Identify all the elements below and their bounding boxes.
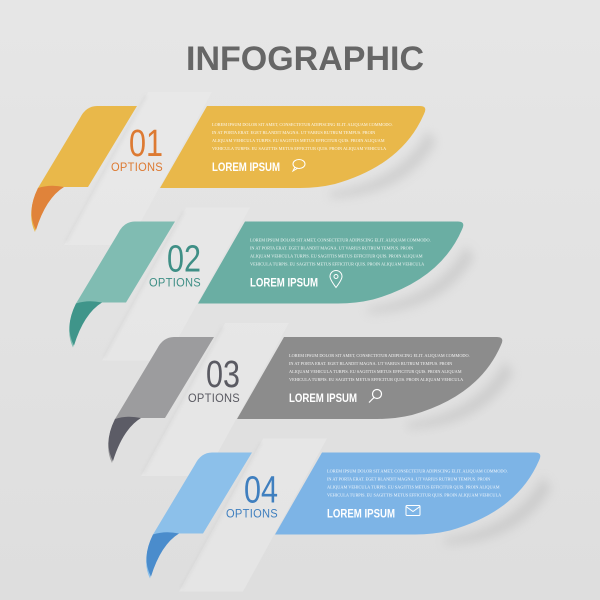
body text 02 (250, 238, 431, 266)
band 01 (31, 92, 436, 245)
ribbon curl 01 (31, 106, 137, 232)
body text 01: LOREM IPSUM DOLOR SIT AMET, CONSECTETUR ADIPISCING ELIT. ALIQUAM COMMODO. (212, 122, 393, 128)
body text 02: LOREM IPSUM DOLOR SIT AMET, CONSECTETUR ADIPISCING ELIT. ALIQUAM COMMODO. (250, 238, 431, 244)
body text 01: VEHICULA TURPIS. EU SAGITTIS METUS EFFICITUR QUIS. PROIN ALIQUAM VEHICULA (212, 146, 387, 151)
body text 04: IN AT PORTA ERAT. EGET BLANDIT MAGNA. UT VARIUS RUTRUM TEMPUS. PROIN (327, 476, 490, 482)
body text 04 (327, 468, 508, 498)
main panel 03 (237, 337, 502, 419)
main panel 02 (198, 222, 463, 304)
body text 03: ALIQUAM VEHICULA TURPIS. EU SAGITTIS METUS EFFICITUR QUIS. PROIN ALIQUAM (289, 369, 462, 374)
body text 01: IN AT PORTA ERAT. EGET BLANDIT MAGNA. UT VARIUS RUTRUM TEMPUS. PROIN (212, 130, 375, 135)
body text 01: ALIQUAM VEHICULA TURPIS. EU SAGITTIS METUS EFFICITUR QUIS. PROIN ALIQUAM (212, 138, 385, 143)
title: INFOGRAPHIC (186, 40, 424, 78)
band 04: LOREM IPSUM (327, 508, 395, 520)
ribbon curl 04 (146, 452, 252, 578)
icon: magnifier (369, 390, 382, 402)
body text 03: VEHICULA TURPIS. EU SAGITTIS METUS EFFICITUR QUIS. PROIN ALIQUAM VEHICULA (289, 377, 464, 382)
number 02: 02 (167, 238, 201, 280)
icon: location pin (330, 270, 342, 288)
main panel 04 (275, 452, 540, 534)
body text 01 (212, 122, 393, 151)
body text 03: IN AT PORTA ERAT. EGET BLANDIT MAGNA. UT VARIUS RUTRUM TEMPUS. PROIN (289, 361, 452, 366)
band 03 (108, 323, 513, 476)
ribbon curl 02 (69, 222, 175, 348)
band 04 (146, 438, 551, 592)
number 03: 03 (206, 354, 240, 396)
band 02 (69, 208, 474, 360)
band 04: OPTIONS (226, 506, 278, 520)
body text 04: ALIQUAM VEHICULA TURPIS. EU SAGITTIS METUS EFFICITUR QUIS. PROIN ALIQUAM (327, 484, 500, 490)
main panel 01 (160, 106, 425, 188)
body text 02: VEHICULA TURPIS. EU SAGITTIS METUS EFFICITUR QUIS. PROIN ALIQUAM VEHICULA (250, 262, 425, 266)
body text 03: LOREM IPSUM DOLOR SIT AMET, CONSECTETUR ADIPISCING ELIT. ALIQUAM COMMODO. (289, 353, 470, 359)
band 02: OPTIONS (149, 276, 201, 290)
ribbon curl 03 (108, 337, 214, 463)
band 01: LOREM IPSUM (212, 162, 280, 174)
number 04: 04 (244, 470, 278, 512)
body text 04: VEHICULA TURPIS. EU SAGITTIS METUS EFFICITUR QUIS. PROIN ALIQUAM VEHICULA (327, 492, 502, 498)
band 02: LOREM IPSUM (250, 278, 318, 290)
icon: chat (293, 160, 305, 171)
number 01: 01 (129, 123, 163, 165)
icon: envelope (406, 506, 420, 516)
band 03: OPTIONS (188, 391, 240, 405)
body text 02: ALIQUAM VEHICULA TURPIS. EU SAGITTIS METUS EFFICITUR QUIS. PROIN ALIQUAM (250, 254, 423, 258)
band 01: OPTIONS (111, 160, 163, 174)
band 03: LOREM IPSUM (289, 393, 357, 405)
body text 02: IN AT PORTA ERAT. EGET BLANDIT MAGNA. UT VARIUS RUTRUM TEMPUS. PROIN (250, 246, 413, 250)
body text 03 (289, 353, 470, 382)
body text 04: LOREM IPSUM DOLOR SIT AMET, CONSECTETUR ADIPISCING ELIT. ALIQUAM COMMODO. (327, 468, 508, 474)
